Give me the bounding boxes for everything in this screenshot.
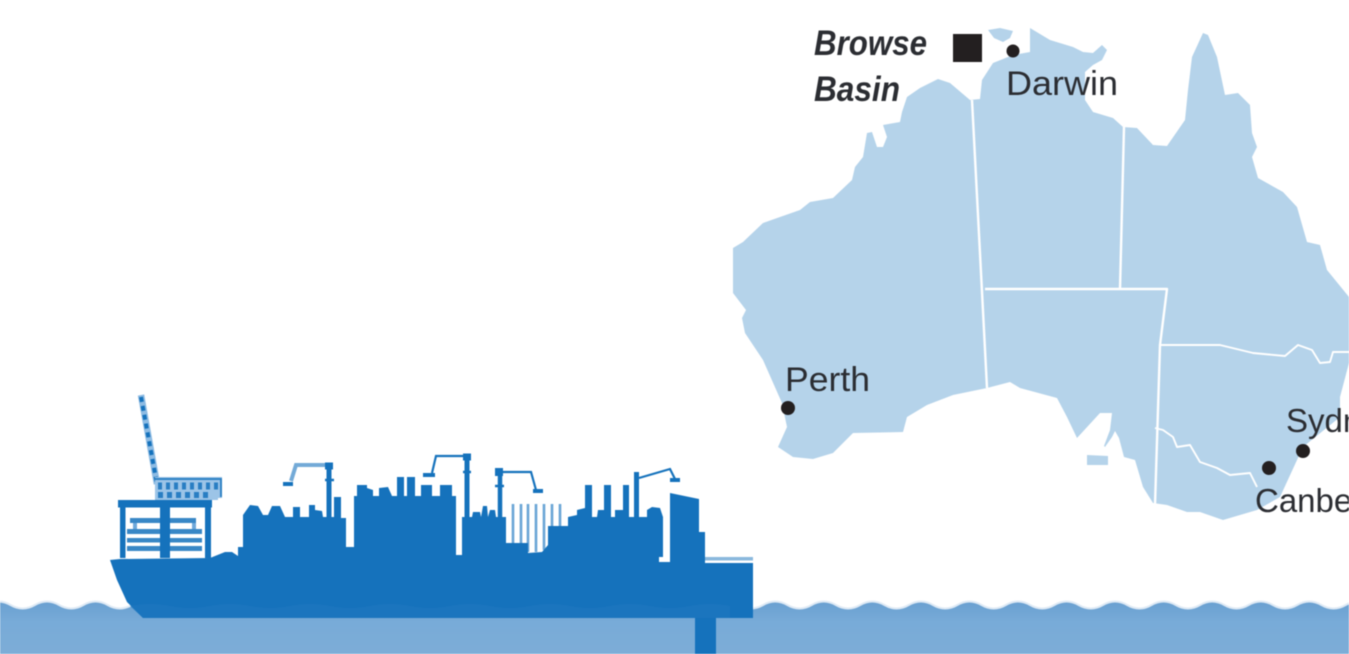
boom lattice [141,395,157,484]
turret legs [120,505,211,558]
gantry lattice [155,477,222,500]
Kangaroo Island [1087,455,1108,465]
marker: Perth [781,401,795,415]
wave surface [0,602,1349,654]
label: Browse Basin: Basin [814,70,900,109]
stripes: cooling columns [513,504,560,552]
riser pipe [695,616,716,654]
label: Browse Basin: Browse [814,24,927,63]
hull and plant silhouette [110,472,753,618]
crane 4 [639,469,680,480]
crane 1 [283,465,334,517]
crane 3 [495,470,543,517]
deck railing [705,557,753,560]
label: Perth: Perth [785,361,870,399]
marker: Canberra [1262,461,1276,475]
marker: Sydney [1296,444,1310,458]
turret deck supports [133,523,196,529]
hull waterline tint [130,604,730,618]
helideck beam [118,500,212,508]
map of Australia [733,28,1349,520]
crane 2 [423,455,471,517]
sea [0,602,1349,654]
Tiwi Islands [988,28,1013,42]
turret module [118,395,222,558]
label: Darwin: Darwin [1006,65,1118,103]
marker: Browse Basin square [953,34,982,62]
mainland [733,28,1349,520]
state borders [972,100,1349,505]
FLNG vessel [110,395,753,654]
turret decks [127,518,202,551]
marker: Darwin [1006,44,1020,58]
